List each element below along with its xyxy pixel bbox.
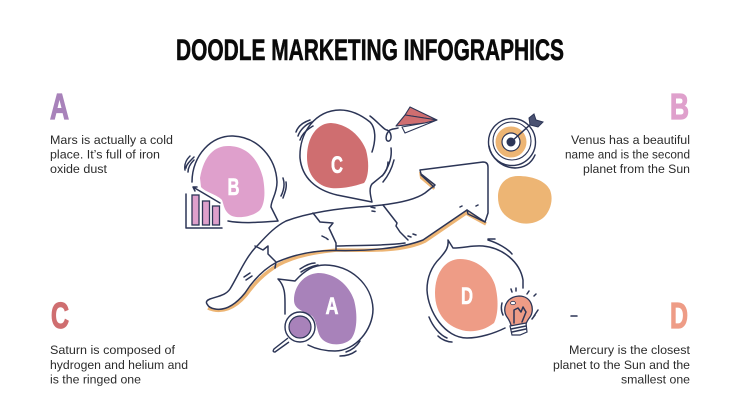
blob B orange (498, 176, 552, 224)
text block: D (553, 295, 691, 386)
target arrow fletching (529, 114, 543, 127)
text block: B: Venus has a beautiful (571, 133, 690, 147)
bubble outline B (192, 136, 278, 223)
bubble outline A (278, 265, 373, 351)
label C: C (331, 152, 343, 179)
text block: C: Saturn is composed of (50, 343, 176, 357)
text block: D: D (670, 295, 688, 336)
text block: A: Mars is actually a cold (50, 133, 173, 147)
blob C (307, 123, 368, 188)
icon: paper plane (396, 107, 437, 133)
bubble outline D (427, 240, 523, 338)
blob B (200, 146, 264, 217)
icon: light bulb (501, 288, 538, 335)
text block: A: oxide dust (50, 162, 108, 176)
text block: B (565, 86, 690, 176)
icon: magnifier (273, 312, 315, 352)
label A: A (326, 293, 338, 320)
text block: C: is the ringed one (50, 372, 141, 386)
text block: C (50, 295, 188, 386)
bubble outline C (300, 110, 391, 202)
growth arrow (206, 162, 488, 310)
arrow cracks (244, 205, 478, 280)
text block: A (50, 86, 173, 176)
text block: D: Mercury is the closest (569, 343, 691, 357)
text block: D: smallest one (621, 372, 690, 386)
text block: A: A (50, 86, 69, 127)
icon: bar chart (186, 187, 222, 228)
title: DOODLE MARKETING INFOGRAPHICS (176, 34, 564, 67)
label B: B (228, 174, 240, 201)
stray dash (571, 315, 577, 317)
text block: A: place. It’s full of iron (50, 148, 160, 162)
icon: target (488, 114, 543, 168)
text block: B: B (670, 86, 689, 127)
text block: B: name and is the second (565, 148, 690, 162)
text block: C: C (51, 295, 69, 336)
blob A (294, 273, 356, 344)
text block: B: planet from the Sun (583, 162, 690, 176)
text block: D: planet to the Sun and the (553, 358, 690, 372)
bubble A (273, 263, 373, 356)
bubble D (427, 239, 538, 342)
bubble C (296, 110, 398, 202)
blob D (435, 259, 498, 331)
label D: D (461, 283, 473, 310)
bubble B (185, 136, 286, 228)
text block: C: hydrogen and helium and (50, 358, 188, 372)
